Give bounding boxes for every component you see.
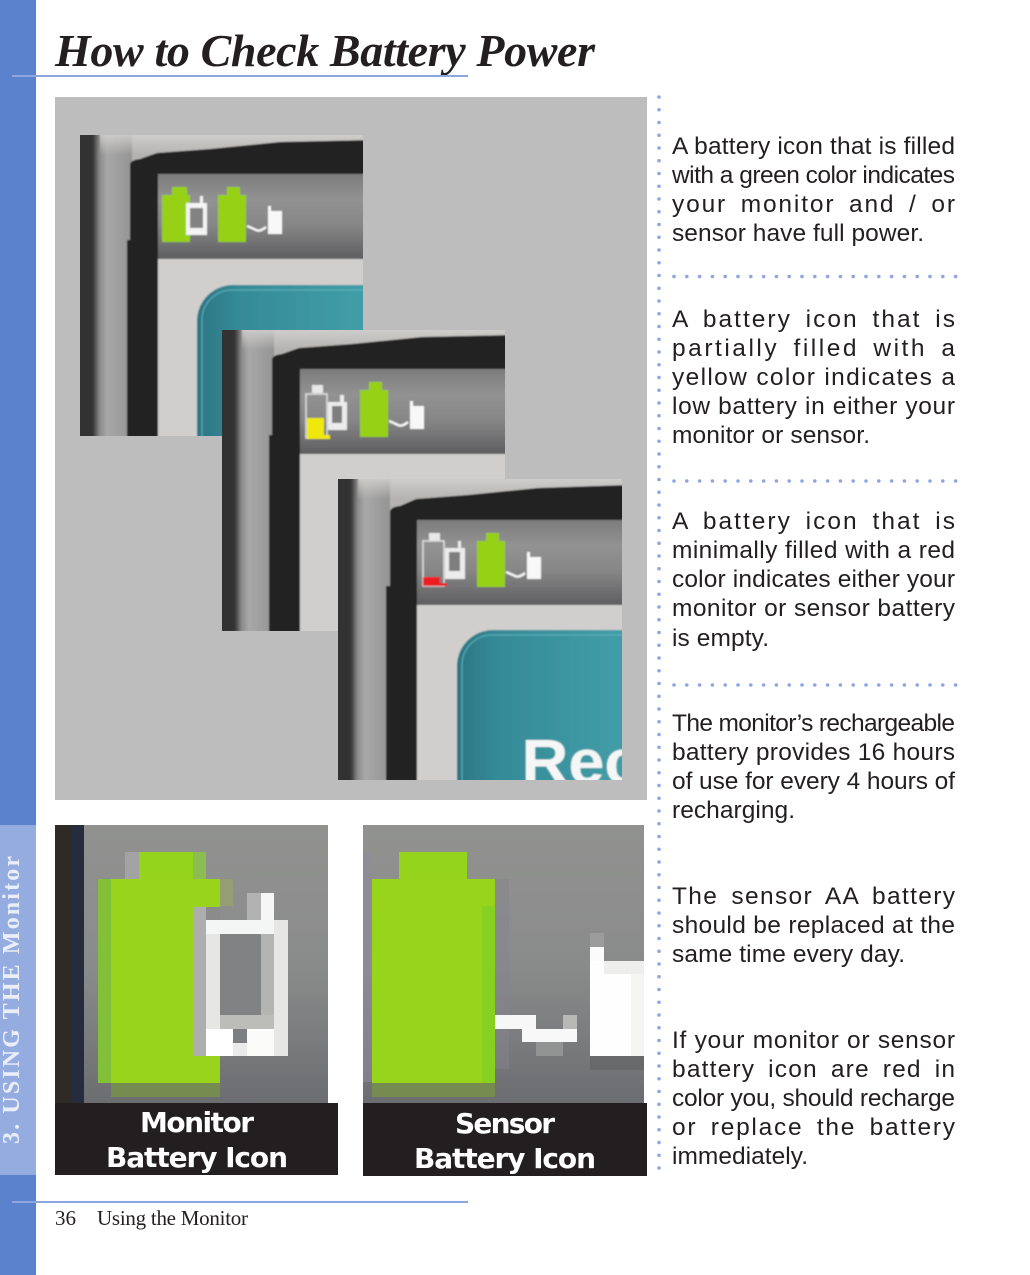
text block: sensor battery replacement: same time every day. <box>672 941 905 968</box>
text block: sensor battery replacement: should be replaced at the <box>672 912 955 939</box>
icon: sensor battery green <box>477 533 505 587</box>
dotted column divider <box>657 97 661 1175</box>
text block: yellow battery: monitor or sensor. <box>672 422 870 449</box>
icon: monitor battery yellow <box>306 385 347 439</box>
text block: recharge time: battery provides 16 hours <box>672 739 955 766</box>
title rule <box>12 75 468 77</box>
icon: monitor battery full <box>162 187 190 242</box>
text block: sensor battery replacement: The sensor AA battery <box>672 883 956 910</box>
text block: red icon advice: immediately. <box>672 1143 808 1170</box>
caption: monitor battery icon: Monitor <box>140 1106 254 1139</box>
text block: red battery: A battery icon that is <box>672 508 955 535</box>
icon: monitor battery red <box>423 533 465 586</box>
text block: recharge time: of use for every 4 hours of <box>672 768 955 795</box>
text block: yellow battery: A battery icon that is <box>672 306 955 333</box>
pixelated green battery <box>372 852 495 1097</box>
pixelated cable and plug <box>495 933 644 1070</box>
text block: red battery: color indicates either your <box>672 566 955 593</box>
text block: yellow battery: yellow color indicates a <box>672 364 955 391</box>
screenshot: red empty battery <box>338 479 622 780</box>
left sidebar strip <box>0 0 36 1275</box>
text block: green battery: A battery icon that is filled <box>672 133 955 160</box>
title: How to Check Battery Power <box>54 25 596 76</box>
text block: red battery: minimally filled with a red <box>672 537 955 564</box>
pixelated phone icon <box>193 893 288 1056</box>
text block: yellow battery <box>672 306 955 449</box>
text block: sensor battery replacement <box>672 883 956 968</box>
text block: recharge time: recharging. <box>672 797 795 824</box>
text block: red battery <box>672 508 956 652</box>
caption: sensor battery icon: Battery Icon <box>414 1142 596 1175</box>
screenshot: yellow low battery <box>218 326 512 636</box>
text block: yellow battery: low battery in either your <box>672 393 955 420</box>
footer page number and section: Using the Monitor <box>97 1206 248 1230</box>
text block: red icon advice: battery icon are red in <box>672 1056 955 1083</box>
text block: green battery: with a green color indicates <box>671 162 955 189</box>
text block: green battery <box>671 133 955 247</box>
caption: sensor battery icon: Sensor <box>455 1107 555 1140</box>
text block: red icon advice <box>672 1027 956 1170</box>
screenshot: full green battery <box>80 135 363 436</box>
text block: recharge time <box>672 710 955 824</box>
text block: red battery: is empty. <box>672 625 769 652</box>
caption: monitor battery icon: Battery Icon <box>106 1141 288 1174</box>
text block: red icon advice: color you, should recharge <box>672 1085 955 1112</box>
pixelated green battery <box>98 852 233 1097</box>
text block: green battery: your monitor and / or <box>672 191 955 218</box>
panel: sensor battery icon close-up <box>363 825 644 1103</box>
text block: red icon advice: If your monitor or sensor <box>672 1027 955 1054</box>
screen button text: Rec <box>522 728 640 797</box>
text block: yellow battery: partially filled with a <box>672 335 955 362</box>
panel: monitor screenshots backdrop <box>55 97 647 800</box>
caption: sensor battery icon <box>363 1103 647 1176</box>
text block: red battery: monitor or sensor battery <box>672 595 956 622</box>
caption: monitor battery icon <box>55 1103 338 1175</box>
text block: red icon advice: or replace the battery <box>672 1114 956 1141</box>
footer rule <box>12 1201 468 1203</box>
text block: recharge time: The monitor’s rechargeable <box>672 710 955 737</box>
panel: monitor battery icon close-up <box>55 825 328 1103</box>
icon: sensor battery green <box>360 382 388 437</box>
footer page number and section: 36 <box>55 1206 76 1230</box>
icon: sensor battery full <box>218 187 246 242</box>
text block: green battery: sensor have full power. <box>672 220 924 247</box>
